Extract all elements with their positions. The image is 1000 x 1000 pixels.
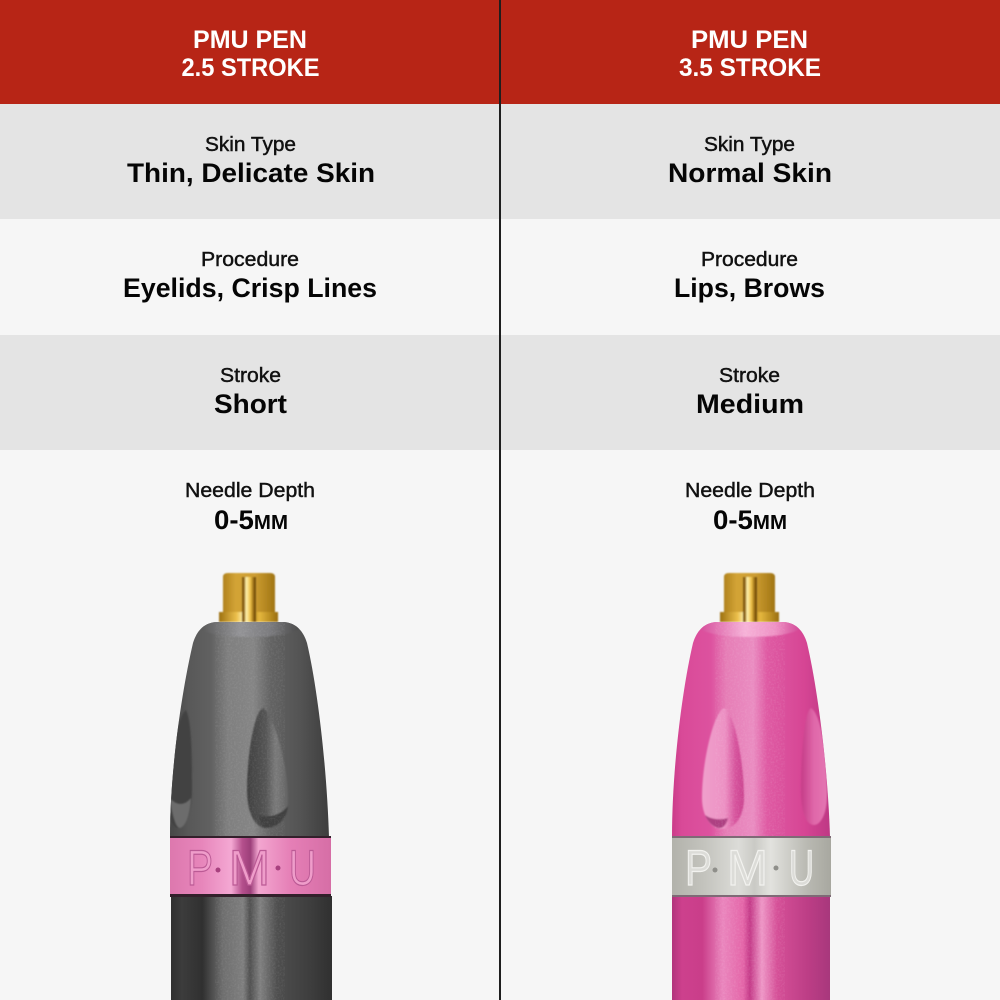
column divider xyxy=(499,0,501,1000)
right stroke: Stroke xyxy=(719,365,780,387)
pink pen body xyxy=(665,617,835,1000)
row band: skin type xyxy=(0,104,1000,219)
left stroke: Short xyxy=(214,389,287,419)
right column heading: 3.5 STROKE xyxy=(679,54,821,82)
right procedure xyxy=(674,249,825,303)
icon: grey PMU pen with pink ring xyxy=(165,573,335,1000)
right stroke: Medium xyxy=(696,389,804,419)
right stroke xyxy=(696,365,804,419)
right column heading: PMU PEN xyxy=(691,26,808,54)
silver ring with PMU engraving: P xyxy=(685,840,712,896)
left column heading xyxy=(182,26,320,82)
silver ring with PMU engraving: M xyxy=(727,840,768,896)
left needle depth: Needle Depth xyxy=(185,480,315,502)
header band xyxy=(0,0,1000,104)
left skin type: Skin Type xyxy=(205,134,296,156)
pink ring with PMU engraving: M xyxy=(229,840,270,896)
icon: pink PMU pen with silver ring xyxy=(665,573,835,1000)
silver ring with PMU engraving xyxy=(672,836,831,897)
left procedure xyxy=(123,249,377,303)
left procedure: Eyelids, Crisp Lines xyxy=(123,273,377,303)
silver ring with PMU engraving: U xyxy=(789,840,814,896)
left stroke xyxy=(214,365,287,419)
left needle depth: 0-5MM xyxy=(214,505,288,535)
left procedure: Procedure xyxy=(201,249,299,271)
left skin type: Thin, Delicate Skin xyxy=(127,158,375,188)
pink ring with PMU engraving: P xyxy=(187,840,213,896)
finger grooves xyxy=(168,708,288,828)
right needle depth xyxy=(685,480,815,535)
right column heading xyxy=(679,26,821,82)
grey pen body xyxy=(165,617,335,1000)
right skin type: Normal Skin xyxy=(668,158,832,188)
left skin type xyxy=(127,134,375,188)
row band: stroke xyxy=(0,335,1000,450)
left needle depth xyxy=(185,480,315,535)
left column heading: 2.5 STROKE xyxy=(182,54,320,82)
right skin type xyxy=(668,134,832,188)
right procedure: Procedure xyxy=(701,249,798,271)
right needle depth: Needle Depth xyxy=(685,480,815,502)
right needle depth: 0-5MM xyxy=(713,505,787,535)
right procedure: Lips, Brows xyxy=(674,273,825,303)
gold needle tip xyxy=(720,573,779,622)
pink ring with PMU engraving: U xyxy=(289,840,316,896)
right skin type: Skin Type xyxy=(704,134,795,156)
gold needle tip xyxy=(219,573,278,622)
pink ring with PMU engraving xyxy=(170,836,331,897)
finger grooves xyxy=(702,708,827,829)
left stroke: Stroke xyxy=(220,365,281,387)
left column heading: PMU PEN xyxy=(193,26,307,54)
